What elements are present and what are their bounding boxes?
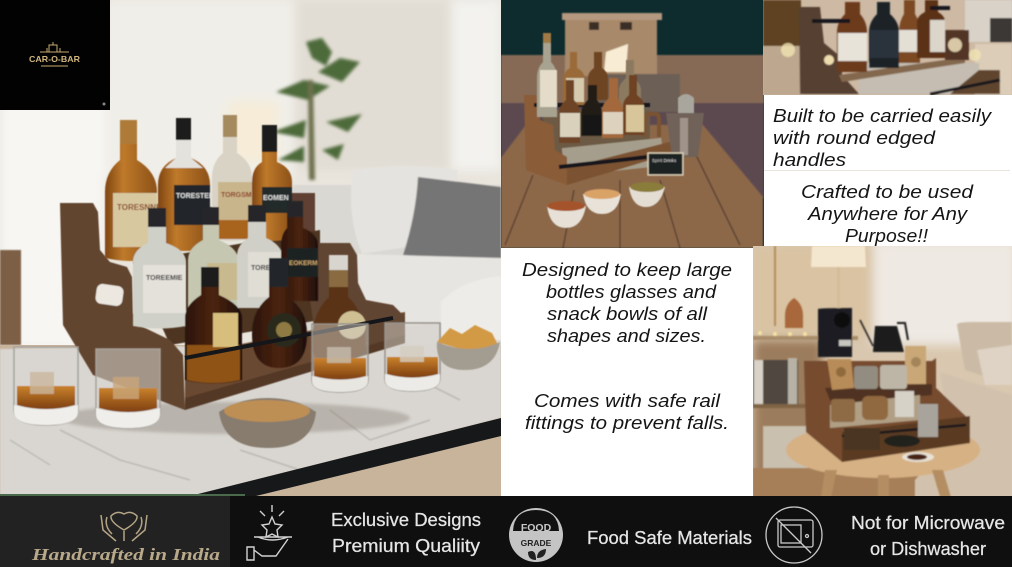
panel: anywhere caption: Crafted to be used [801,182,974,202]
footer: not for microwave: or Dishwasher [870,539,986,559]
panel: anywhere caption [764,170,1010,246]
icon: crossed-out microwave [766,507,822,563]
footer: not for microwave: Not for Microwave [851,513,1005,533]
footer: handcrafted badge: Handcrafted in India [31,545,221,564]
spice basket [844,428,880,450]
plant [272,38,362,180]
chalkboard sign [648,153,683,175]
footer bar [230,496,1012,567]
safety rail [185,318,393,358]
bottles [537,33,557,117]
rack [542,110,650,154]
floor [0,345,501,496]
footer: handcrafted badge [0,494,245,567]
icon: food grade badge [509,508,563,562]
marble table [0,342,501,496]
bottles: TORE [251,265,271,272]
panel: design and safety caption: shapes and sizes. [547,326,706,346]
panel: anywhere caption: Anywhere for Any [807,204,968,224]
footer: exclusive designs: Premium Qualiity [332,536,480,556]
logo mark [40,42,69,66]
sofa [914,394,1012,496]
panel: carrying caption [764,95,1010,170]
round table [786,432,980,478]
metal cup [918,404,938,437]
footer: exclusive designs: Exclusive Designs [331,510,481,530]
coffee machine [818,308,852,357]
photo: rack on patio table with fire pit: Spirit Drinks [652,158,677,163]
icon: hands holding heart [101,512,147,541]
logo panel: CAR-O-BAR [29,54,80,64]
mugs [854,366,878,389]
panel: design and safety caption: snack bowls of all [547,304,708,324]
panel: carrying caption: handles [773,150,846,170]
glasses [14,323,440,428]
rack [804,358,970,462]
bottles: EOKERM [289,260,318,267]
icon: star on serving tray [247,505,292,560]
ice bucket and shaker [678,94,694,115]
bottles [105,115,366,384]
bottles: TORGSM [221,192,252,199]
footer: not for microwave [766,507,1005,563]
snack bowls [219,325,500,448]
photo: rack on patio table with fire pit [501,0,764,248]
jars [831,399,855,422]
footer: food safe materials [509,508,752,562]
photo: rack handles close-up [763,0,1012,95]
panel: anywhere caption: Purpose!! [845,226,928,246]
footer: food safe materials: Food Safe Materials [587,528,752,548]
logo panel [0,0,110,110]
panel: carrying caption: Built to be carried easily [773,106,992,126]
photo: whisky bottles on wooden rack in living room [0,0,501,496]
icon: food grade badge: GRADE [521,538,552,548]
bottles: TOREEMIE [146,275,183,282]
bottles: TORESNNE [117,203,162,212]
photo: rack as coffee station [753,240,1012,497]
panel: design and safety caption: Designed to keep large [522,260,732,280]
sofa [0,166,501,345]
panel: carrying caption: with round edged [773,128,936,148]
bottles: TORESTEB [176,193,214,200]
panel: design and safety caption [502,248,752,497]
panel: design and safety caption: fittings to prevent falls. [525,413,729,433]
bowls [547,206,586,228]
panel: design and safety caption: Comes with safe rail [534,391,721,411]
footer: exclusive designs [247,505,481,560]
icon: food grade badge: FOOD [521,522,552,534]
coffee bags [827,359,854,390]
bottles: EOMEN [263,195,289,202]
wooden rack [60,193,405,410]
panel: design and safety caption: bottles glasses and [546,282,717,302]
kettle [873,326,904,352]
